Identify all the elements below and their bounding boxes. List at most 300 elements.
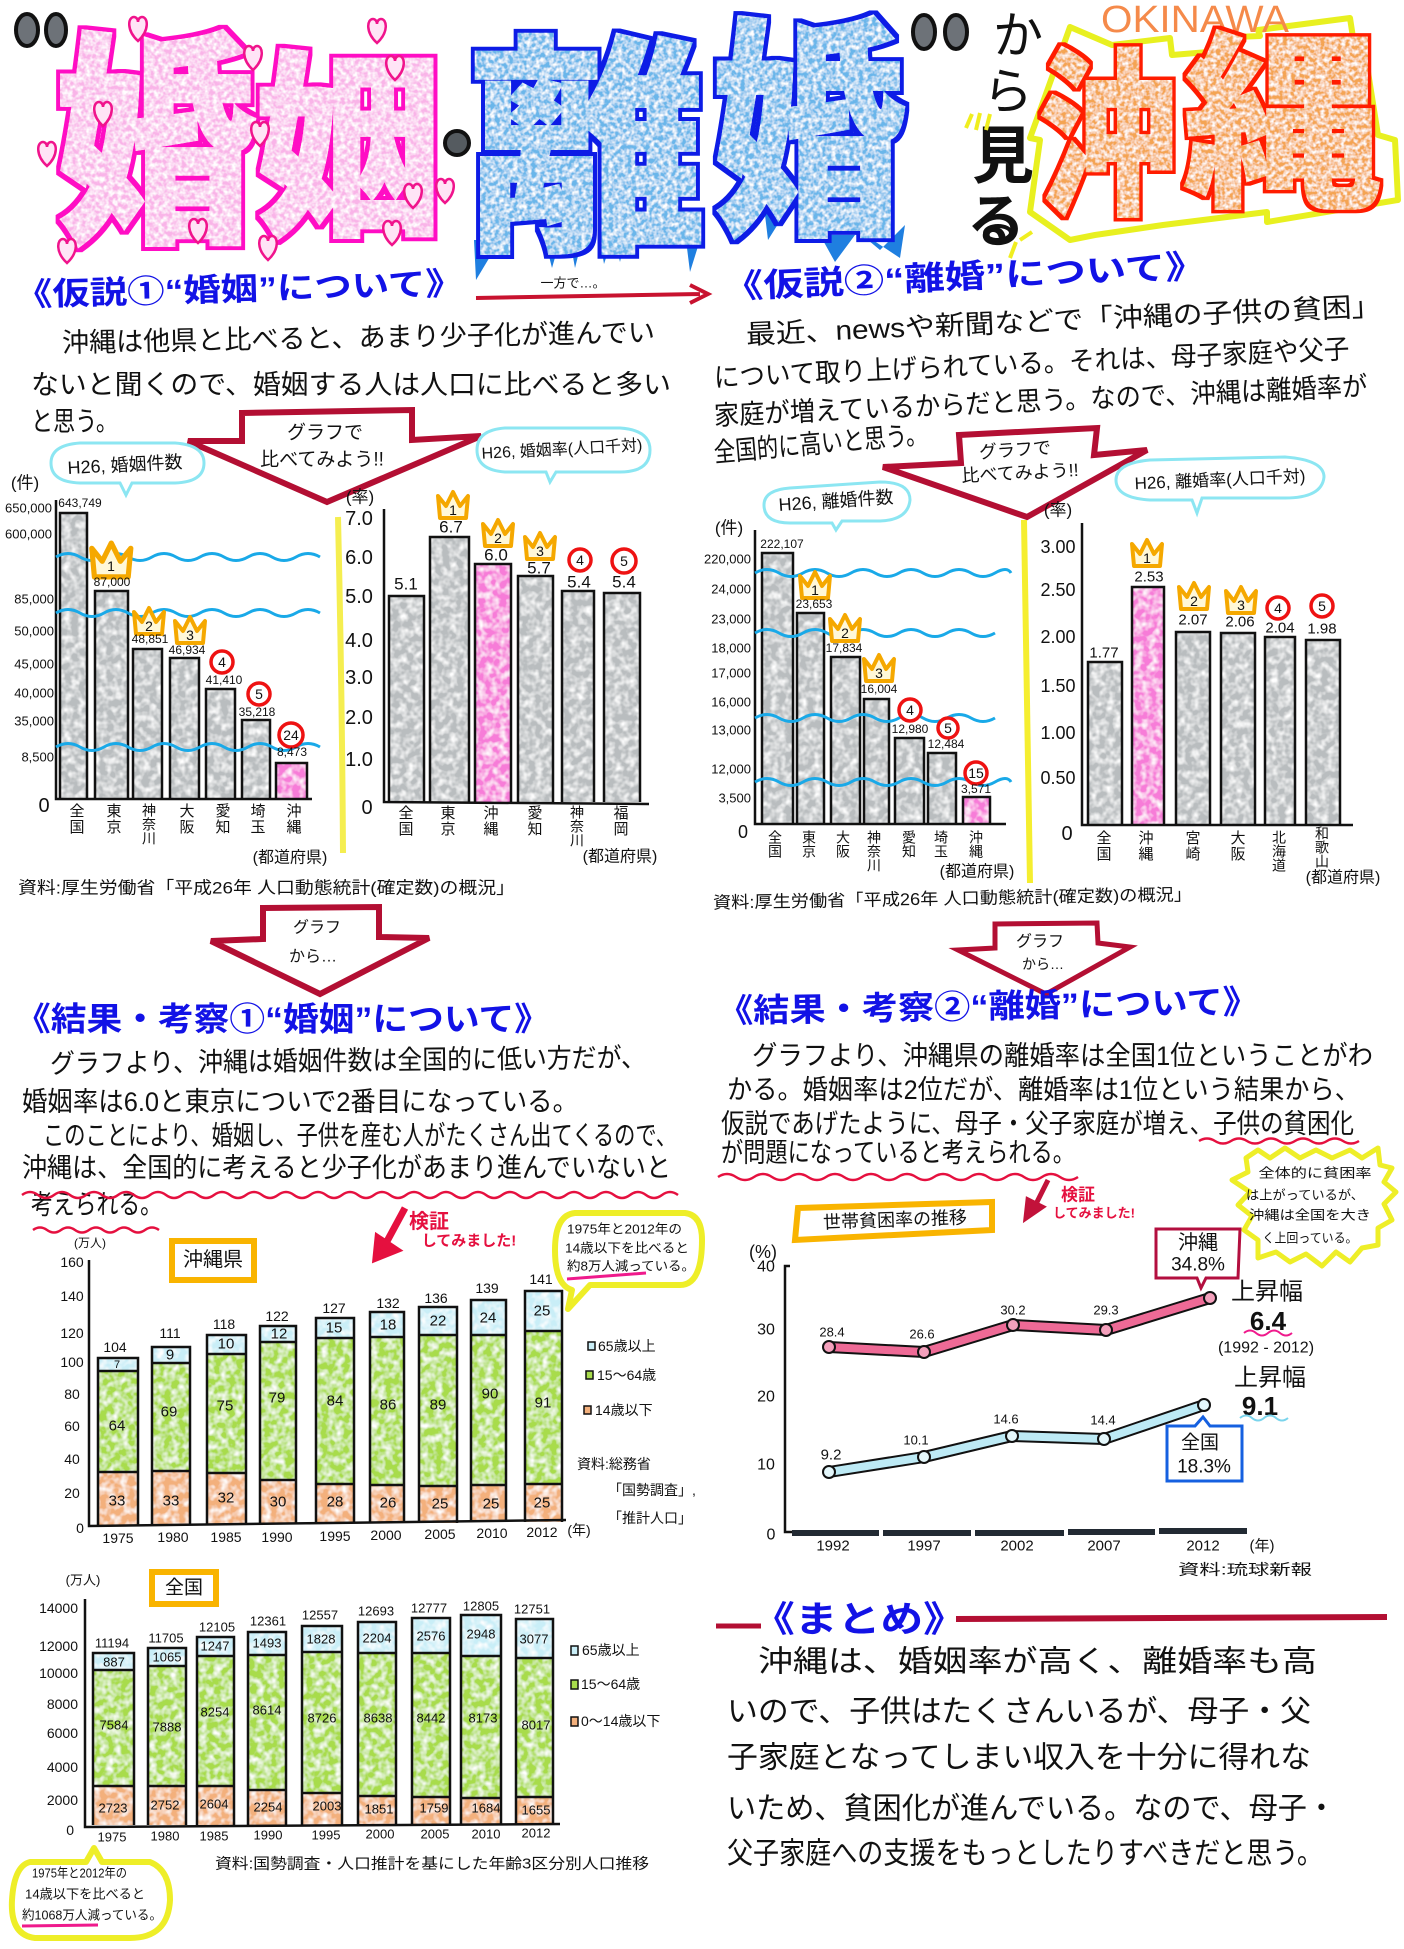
x axis labels: 1980 — [151, 1828, 179, 1844]
y axis labels: 1.00 — [1040, 723, 1076, 743]
arrow label: 一方で…。 — [540, 276, 606, 290]
title connector: kara miru: か — [993, 8, 1043, 64]
hypothesis 2 heading: 《仮説②“離婚”について》 — [722, 247, 1206, 305]
ranking crowns: 4 — [576, 552, 584, 568]
arrow: from graph (left) — [211, 907, 429, 994]
ranking crowns: 2 — [494, 530, 502, 546]
segment values: 8017 — [522, 1718, 550, 1732]
verify note left — [376, 1208, 516, 1258]
ranking crowns: 5 — [620, 553, 628, 569]
ranking crowns: 5 — [1318, 598, 1326, 614]
x axis labels: 2007 — [1087, 1538, 1121, 1554]
source note: 「国勢調査」, — [608, 1482, 696, 1498]
callout: okinawa children decrease: 約8万人減っている。 — [567, 1258, 695, 1274]
ranking crowns: 1 — [811, 582, 819, 598]
line: national — [823, 1399, 1210, 1478]
segment values: 90 — [482, 1386, 498, 1402]
category labels: 福岡 — [612, 805, 628, 837]
bars — [389, 537, 640, 802]
ranking crowns: 4 — [218, 654, 226, 670]
callout: national children decrease — [12, 1848, 170, 1938]
y axis labels — [60, 1254, 84, 1536]
axes — [384, 509, 649, 804]
data labels: 28.4 — [819, 1324, 845, 1340]
y axis labels — [1040, 537, 1076, 845]
ranking crowns: 24 — [283, 727, 299, 743]
segment values: 2003 — [313, 1798, 341, 1814]
red arrow — [1026, 1180, 1048, 1218]
verify note left: 検証 — [409, 1210, 449, 1233]
value labels: 41,410 — [206, 673, 243, 687]
category labels — [767, 830, 984, 872]
category labels: 沖縄 — [1136, 830, 1154, 862]
category labels: 沖縄 — [482, 805, 498, 837]
value labels: 5.4 — [567, 572, 591, 592]
segment values: 25 — [534, 1494, 550, 1512]
segment values: 22 — [430, 1312, 446, 1330]
y axis labels: 2.50 — [1040, 580, 1076, 600]
category labels: 沖縄 — [968, 830, 984, 858]
bubble: chart title — [51, 443, 204, 495]
ranking crowns: 2 — [841, 625, 849, 641]
y axis labels: 23,000 — [711, 612, 751, 626]
arrow: from graph (right): から… — [1022, 956, 1064, 972]
results 1 text: このことにより、婚姻し、子供を産む人がたくさん出てくるので、 — [43, 1121, 677, 1151]
segment values: 2604 — [200, 1796, 228, 1812]
segment values: 33 — [109, 1492, 125, 1510]
category labels: 埼玉 — [248, 803, 266, 835]
y axis labels: 120 — [60, 1325, 84, 1341]
y axis labels: 16,000 — [711, 694, 751, 710]
ranking crowns: 3 — [536, 543, 544, 559]
arrow: compare graphs (left): グラフで — [287, 422, 363, 444]
y axis labels: 24,000 — [711, 582, 751, 596]
y axis labels: 220,000 — [704, 552, 751, 566]
category labels — [396, 805, 628, 847]
y axis labels — [5, 500, 54, 817]
ranking crowns: 3 — [875, 665, 883, 681]
segment values: 28 — [327, 1494, 343, 1510]
legend: 15〜64歳 — [597, 1367, 656, 1383]
title connector: kara miru: ら — [983, 64, 1033, 120]
results 1 heading: 《結果・考察①“婚姻”について》 — [15, 1000, 550, 1038]
value labels: 2.04 — [1265, 620, 1295, 636]
value labels: 35,218 — [239, 705, 276, 719]
y axis labels: 40 — [757, 1258, 775, 1276]
segment values: 7888 — [153, 1720, 181, 1734]
line: okinawa — [823, 1292, 1216, 1358]
segment values: 12 — [271, 1326, 287, 1342]
arrow: compare graphs (right): 比べてみよう!! — [961, 460, 1079, 486]
ranking crowns: 3 — [1237, 597, 1245, 613]
chart: household poverty rate — [749, 1202, 1314, 1578]
y axis unit: (件) — [715, 518, 743, 538]
segment values: 79 — [269, 1390, 285, 1406]
summary text: 沖縄は、婚姻率が高く、離婚率も高 — [758, 1646, 1317, 1678]
totals: 122 — [265, 1308, 289, 1324]
y axis labels: 0 — [738, 822, 748, 842]
y axis labels: 35,000 — [14, 714, 54, 728]
burst callout: は上がっているが、 — [1246, 1188, 1364, 1202]
title word: okinawa — [1039, 21, 1380, 238]
hypothesis 1 text — [31, 318, 671, 437]
results 1 text: 考えられる。 — [31, 1190, 162, 1220]
value labels: 6.0 — [484, 546, 508, 564]
chart title box — [152, 1572, 216, 1604]
chart title box — [172, 1241, 254, 1280]
value labels: 12,980 — [892, 722, 929, 736]
hypothesis 1 text: 沖縄は他県と比べると、あまり少子化が進んでい — [62, 318, 655, 358]
arrow: from graph (left): から… — [289, 948, 337, 966]
value labels: 3,571 — [961, 782, 991, 796]
title word: okinawa: 沖 — [1039, 38, 1177, 238]
title word: marriage — [56, 21, 442, 273]
ranking crowns — [92, 543, 303, 747]
category labels: 愛知 — [526, 805, 542, 837]
category labels: 東京 — [438, 805, 456, 837]
segment values: 1065 — [153, 1650, 181, 1664]
segment values: 84 — [327, 1392, 343, 1410]
segment values: 8254 — [201, 1704, 229, 1720]
ranking crowns — [800, 572, 987, 784]
callout: okinawa 34.8: 34.8% — [1171, 1254, 1225, 1276]
burst callout: 全体的に貧困率 — [1258, 1166, 1372, 1180]
title word: divorce: 離 — [471, 23, 705, 281]
burst callout: 沖縄は全国を大き — [1249, 1208, 1371, 1222]
unit: (万人) — [74, 1236, 106, 1250]
category labels: 埼玉 — [933, 830, 949, 858]
eye detail — [985, 226, 1011, 240]
axis break waves — [755, 570, 1011, 576]
segment values: 2254 — [254, 1800, 282, 1814]
x axis labels: 2002 — [1000, 1538, 1034, 1554]
category labels: 大阪 — [1228, 830, 1246, 862]
callout: okinawa children decrease — [555, 1213, 702, 1309]
category labels: 宮崎 — [1184, 830, 1200, 862]
ranking crowns: 1 — [1143, 550, 1151, 566]
segment values: 8726 — [308, 1710, 336, 1726]
arrow: compare graphs (left): 比べてみよう!! — [260, 448, 384, 470]
x axis labels: 1992 — [816, 1538, 850, 1554]
segment values: 1493 — [253, 1636, 281, 1650]
x axis labels: 2005 — [421, 1826, 449, 1842]
bubble: chart title: H26, 離婚件数 — [778, 487, 894, 515]
bubble: chart title: H26, 婚姻件数 — [67, 452, 183, 478]
rise note: okinawa: 6.4 — [1250, 1306, 1287, 1336]
category labels: 神奈川 — [141, 803, 157, 845]
callout: national 18.3: 18.3% — [1177, 1456, 1231, 1478]
title connector: kara miru: る — [967, 190, 1025, 254]
value labels — [1089, 568, 1337, 662]
x axis labels: 2005 — [424, 1526, 456, 1542]
category labels — [68, 803, 302, 845]
totals — [103, 1271, 553, 1355]
totals: 12777 — [411, 1600, 447, 1616]
y axis labels — [345, 508, 373, 819]
summary text: 子家庭となってしまい収入を十分に得れな — [727, 1742, 1311, 1774]
yellow halo behind okinawa — [1030, 18, 1398, 240]
callout: national 18.3 — [1167, 1417, 1242, 1481]
okinawa label: OKINAWA — [1101, 0, 1290, 41]
quotation mark: close — [913, 15, 967, 49]
bubble: chart title: H26, 婚姻率(人口千対) — [481, 436, 643, 463]
ranking crowns: 15 — [968, 765, 984, 781]
bar outlines — [60, 513, 307, 799]
y axis labels: 6.0 — [345, 547, 373, 569]
callout: okinawa children decrease: 1975年と2012年の — [567, 1222, 682, 1236]
x axis labels: 1975 — [98, 1830, 126, 1844]
value labels: 5.4 — [612, 572, 636, 592]
segment values — [99, 1626, 550, 1818]
segment values: 75 — [217, 1398, 233, 1414]
x axis labels: 2000 — [366, 1826, 394, 1842]
value labels: 643,749 — [58, 496, 102, 510]
chart: marriages count 2014 — [5, 443, 327, 866]
value labels: 16,004 — [861, 682, 898, 696]
ranking crowns: 2 — [1190, 593, 1198, 609]
burst callout — [1232, 1148, 1396, 1266]
legend — [584, 1338, 656, 1418]
category labels: 東京 — [104, 803, 122, 835]
rise note: okinawa: 上昇幅 — [1231, 1278, 1303, 1306]
value labels: 5.7 — [527, 558, 551, 578]
chart title box: 世帯貧困率の推移 — [823, 1207, 967, 1233]
value labels: 23,653 — [796, 597, 833, 611]
segment values: 2204 — [363, 1630, 391, 1646]
title separator dot — [445, 131, 469, 155]
totals: 11705 — [148, 1630, 184, 1646]
segment values: 1247 — [201, 1638, 229, 1654]
ranking crowns: 3 — [186, 627, 194, 643]
segment values: 89 — [430, 1396, 446, 1414]
category labels: 北海道 — [1271, 830, 1287, 873]
results 1 text — [22, 1043, 677, 1220]
callout: okinawa 34.8: 沖縄 — [1178, 1231, 1218, 1254]
segment values: 10 — [218, 1336, 234, 1352]
y axis labels: 40 — [64, 1451, 80, 1467]
axes — [1082, 523, 1353, 825]
segment values: 2752 — [151, 1798, 179, 1812]
bars — [762, 553, 990, 824]
verify note right: してみました! — [1053, 1206, 1135, 1220]
ranking crowns: 4 — [1274, 600, 1282, 616]
y axis labels: 12000 — [39, 1638, 78, 1654]
chart: marriage rate 2014: (都道府県) — [583, 848, 657, 866]
segment values: 1684 — [472, 1800, 500, 1816]
y axis labels: 0.50 — [1040, 768, 1076, 788]
y axis labels: 650,000 — [5, 500, 52, 516]
segment values: 25 — [534, 1302, 550, 1320]
chart: divorce rate 2014: (都道府県) — [1306, 868, 1380, 886]
x axis labels: 2012 — [522, 1826, 550, 1840]
value labels: 2.53 — [1134, 568, 1164, 586]
category labels: 沖縄 — [284, 803, 302, 835]
rise note: okinawa: (1992 - 2012) — [1218, 1340, 1314, 1356]
x axis labels: 1997 — [907, 1538, 941, 1554]
x axis labels: (年) — [567, 1522, 591, 1538]
yellow divider right — [1024, 520, 1030, 883]
x axis labels: 1995 — [319, 1528, 351, 1544]
category labels: 全国 — [767, 830, 783, 858]
value labels — [58, 496, 307, 759]
y axis labels: 50,000 — [14, 624, 54, 638]
legend: 14歳以下 — [595, 1402, 653, 1418]
x axis labels: 1985 — [210, 1529, 242, 1545]
y axis labels: 100 — [60, 1354, 84, 1370]
segment values: 3077 — [520, 1632, 548, 1646]
segment values: 8173 — [469, 1710, 497, 1726]
category labels: 愛知 — [214, 803, 230, 835]
y axis labels: (%) — [749, 1242, 777, 1262]
source note right: 資料:厚生労働省「平成26年 人口動態統計(確定数)の概況」 — [713, 885, 1192, 912]
y axis labels: 20 — [757, 1388, 775, 1406]
segment values: 1655 — [522, 1802, 550, 1818]
value labels: 46,934 — [169, 643, 206, 657]
chart: okinawa population — [60, 1236, 696, 1546]
summary text — [727, 1646, 1336, 1870]
rise note: okinawa — [1218, 1278, 1314, 1356]
hypothesis 1 heading: 《仮説①“婚姻”について》 — [15, 265, 463, 313]
source note: 「推計人口」 — [608, 1510, 692, 1526]
title word: divorce — [471, 6, 905, 281]
value labels: 5.1 — [394, 574, 418, 594]
chart: divorces count 2014: (都道府県) — [940, 862, 1014, 880]
totals: 12361 — [250, 1614, 286, 1628]
value labels: 87,000 — [94, 575, 131, 589]
value labels: 8,473 — [277, 745, 307, 759]
legend: 65歳以上 — [598, 1338, 656, 1354]
bar outlines — [389, 537, 640, 802]
source note — [577, 1456, 696, 1526]
y axis labels: 3,500 — [718, 790, 751, 806]
y axis labels: 10000 — [39, 1665, 78, 1681]
y axis labels: 0 — [66, 1822, 74, 1838]
y axis labels: 12,000 — [711, 762, 751, 776]
y axis labels: 0 — [361, 797, 373, 819]
category labels: 神奈川 — [866, 830, 882, 872]
value labels: 48,851 — [132, 632, 169, 646]
y axis labels: 40,000 — [14, 686, 54, 700]
segment values: 25 — [483, 1496, 499, 1512]
hypothesis 2 text — [713, 291, 1382, 468]
y axis labels: 30 — [757, 1322, 775, 1338]
y axis labels: 0 — [1061, 823, 1073, 845]
segment values: 8442 — [417, 1710, 445, 1726]
value labels: 222,107 — [760, 537, 804, 551]
chart: national population — [39, 1572, 660, 1844]
segment values: 2723 — [99, 1800, 127, 1816]
y axis labels: 2000 — [47, 1792, 78, 1808]
category labels: 全国 — [396, 805, 414, 837]
value labels — [760, 537, 991, 796]
arrow: compare graphs (left) — [188, 410, 481, 502]
x axis labels: 2012 — [1186, 1538, 1220, 1554]
data labels: 9.2 — [821, 1446, 841, 1464]
x axis labels: 2000 — [370, 1527, 402, 1543]
y axis labels: 13,000 — [711, 722, 751, 738]
hypothesis 2 text: 全国的に高いと思う。 — [713, 419, 928, 468]
y axis labels: 80 — [64, 1386, 80, 1402]
y axis labels: 7.0 — [345, 508, 373, 530]
yellow divider left — [338, 517, 343, 853]
x axis labels — [816, 1538, 1274, 1554]
summary heading: 《まとめ》 — [752, 1598, 966, 1640]
y axis labels: 0 — [76, 1520, 84, 1536]
y axis labels: 5.0 — [345, 586, 373, 608]
ranking crowns: 5 — [255, 686, 263, 702]
segment values: 86 — [380, 1396, 396, 1414]
totals: 132 — [376, 1295, 400, 1311]
x axis labels: 1995 — [312, 1828, 340, 1842]
y axis labels: 140 — [60, 1288, 84, 1304]
results 2 text: グラフより、沖縄県の離婚率は全国1位ということがわ — [752, 1041, 1373, 1071]
segment values: 9 — [166, 1346, 174, 1364]
results 2 text: が問題になっていると考えられる。 — [721, 1138, 1075, 1168]
totals: 12751 — [514, 1602, 550, 1616]
callout: okinawa 34.8 — [1156, 1229, 1240, 1288]
bubble: chart title — [477, 428, 650, 482]
source note left: 資料:厚生労働省「平成26年 人口動態統計(確定数)の概況」 — [18, 878, 515, 898]
value labels: 17,834 — [826, 641, 863, 655]
segment values: 8614 — [253, 1702, 281, 1718]
ranking crowns: 2 — [145, 618, 153, 634]
totals: 127 — [322, 1300, 346, 1316]
stacked bars — [93, 1615, 553, 1825]
ranking crowns — [1132, 540, 1333, 619]
totals: 118 — [213, 1316, 235, 1332]
hypothesis 2 text: 家庭が増えているからだと思う。なので、沖縄は離婚率が — [713, 371, 1368, 431]
title word: okinawa: 縄 — [1184, 21, 1380, 231]
title word: divorce: 婚 — [713, 6, 905, 266]
y axis labels — [39, 1600, 78, 1838]
y axis labels: 600,000 — [5, 526, 52, 542]
hearts around marriage title — [38, 17, 454, 263]
rise note: national: 9.1 — [1242, 1391, 1278, 1421]
y axis labels: 8000 — [47, 1696, 78, 1712]
legend — [571, 1642, 660, 1729]
yellow emphasis rays — [966, 113, 1032, 258]
bar outlines — [1088, 587, 1340, 825]
callout: national 18.3: 全国 — [1181, 1432, 1219, 1454]
segment values: 7 — [114, 1359, 120, 1371]
ranking crowns: 1 — [107, 558, 115, 574]
segment values: 887 — [103, 1654, 125, 1670]
segment values — [109, 1302, 551, 1512]
icicle drips — [474, 190, 905, 280]
hypothesis 2 text: について取り上げられている。それは、母子家庭や父子 — [713, 334, 1350, 393]
wavy underline: results 2 — [718, 1138, 1359, 1180]
hypothesis 2 text: 最近、newsや新聞などで「沖縄の子供の貧困」 — [745, 291, 1382, 350]
arrow: compare graphs (right): グラフで — [978, 438, 1052, 462]
summary text: いため、貧困化が進んでいる。なので、母子・ — [727, 1792, 1336, 1826]
unit: (万人) — [66, 1572, 100, 1588]
value labels: 2.06 — [1225, 614, 1255, 630]
title connector: kara miru: 見 — [972, 122, 1034, 192]
quotation mark: open — [16, 14, 66, 46]
category labels: 全国 — [1094, 830, 1112, 862]
y axis labels: 4000 — [47, 1759, 78, 1775]
ranking crowns: 5 — [944, 720, 952, 736]
bar outlines — [762, 553, 990, 824]
axes — [85, 1599, 560, 1827]
stacked bar outlines — [93, 1615, 553, 1825]
totals — [95, 1598, 550, 1650]
callout: okinawa children decrease: 14歳以下を比べると — [565, 1240, 689, 1256]
y axis labels: 1.50 — [1040, 676, 1076, 696]
totals: 141 — [529, 1271, 553, 1287]
segment values: 2576 — [417, 1628, 445, 1644]
results 2 heading: 《結果・考察②“離婚”について》 — [717, 983, 1259, 1029]
